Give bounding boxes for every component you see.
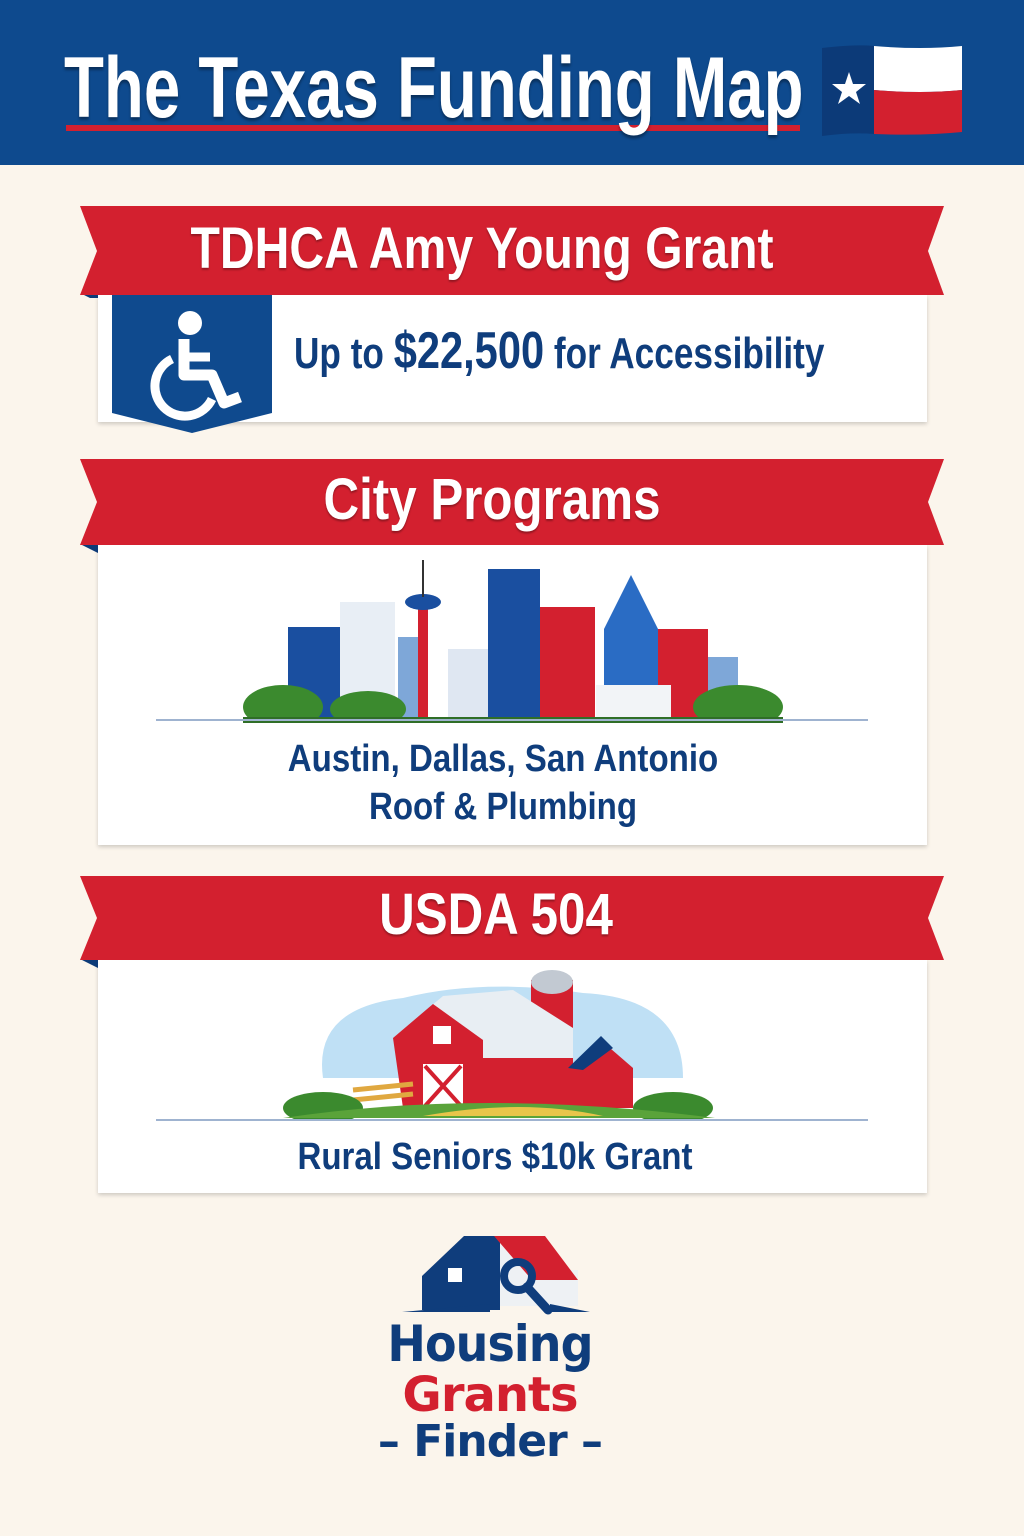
text: cities: Austin, Dallas, San Antonio: [288, 738, 718, 780]
ribbon heading: [80, 206, 944, 298]
icon: wheelchair badge: [112, 295, 272, 433]
ribbon heading: City Programs: [324, 467, 660, 532]
ribbon heading: TDHCA Amy Young Grant: [190, 216, 774, 281]
panel: USDA 504: [80, 876, 944, 1197]
header bar: [0, 0, 1024, 165]
barn illustration: [283, 970, 715, 1119]
ribbon heading: [80, 876, 944, 968]
text: amount: Up to $22,500 for Accessibility: [294, 322, 824, 380]
logo: Housing Grants Finder: Housing: [387, 1315, 593, 1373]
text: cities: Roof & Plumbing: [369, 786, 637, 828]
icon: house with magnifier: [402, 1236, 590, 1314]
ribbon heading: [80, 459, 944, 553]
logo: Housing Grants Finder: [378, 1236, 602, 1467]
title: The Texas Funding Map: [64, 40, 804, 136]
text: cities: [288, 738, 718, 828]
skyline illustration: [243, 560, 783, 723]
panel: TDHCA Amy Young Grant: [80, 206, 944, 433]
ribbon heading: USDA 504: [379, 882, 613, 947]
logo: Housing Grants Finder: – Finder –: [378, 1416, 602, 1467]
icon: Texas flag: [822, 46, 962, 136]
text: rural seniors: Rural Seniors $10k Grant: [297, 1136, 693, 1178]
panel: City Programs: [80, 459, 944, 849]
logo: Housing Grants Finder: Grants: [402, 1367, 578, 1423]
